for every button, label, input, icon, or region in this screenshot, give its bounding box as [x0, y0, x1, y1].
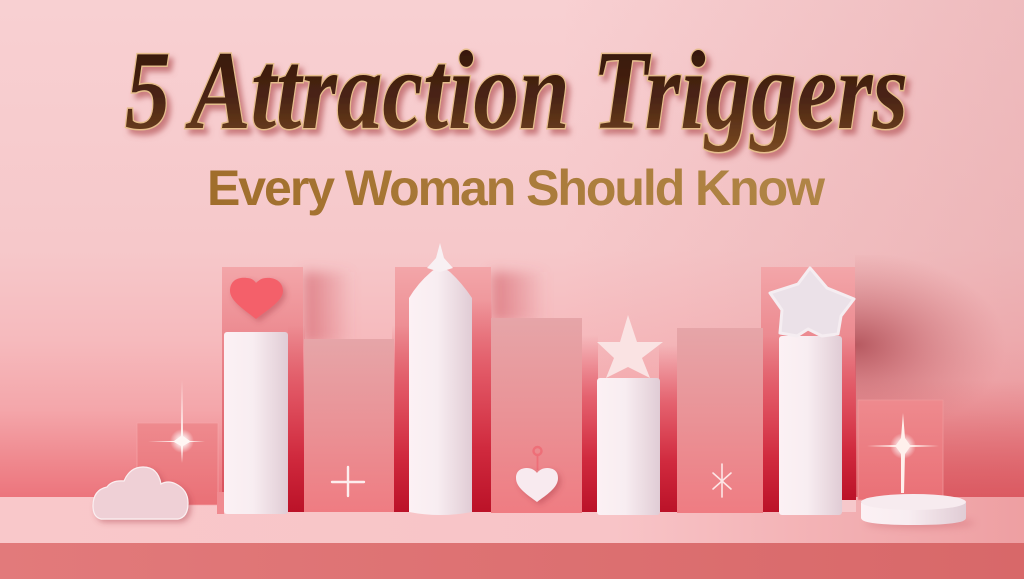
back panel: large star [761, 267, 855, 500]
bar 3: cylinder [597, 378, 660, 515]
small panel: left sparkle [137, 423, 224, 514]
icon: cloud [93, 467, 188, 519]
back panel: tall centre [395, 267, 491, 497]
icon: large white star [770, 268, 854, 336]
back panel: heart [222, 267, 303, 497]
disc podium [861, 494, 975, 528]
front panel 4 [677, 328, 763, 513]
front panel 3 [491, 318, 582, 513]
icon: right sparkle [867, 413, 939, 493]
front panel 2 [304, 339, 394, 512]
icon: pale star [597, 315, 663, 378]
bar 2: tall cone-topped cylinder [409, 243, 472, 515]
icon: plus [332, 467, 364, 496]
shelf [0, 497, 1024, 579]
dark red gaps between the bars [288, 300, 856, 512]
icon: white heart with ring [516, 447, 558, 502]
icon: red heart [230, 278, 283, 319]
small panel: right sparkle [858, 400, 943, 500]
bar 1: cylinder [224, 332, 288, 514]
bar 4: cylinder [779, 336, 842, 515]
subtitle: Every Woman Should Know [207, 160, 825, 216]
icon: asterisk sparkle [713, 464, 731, 497]
icon: left sparkle [148, 380, 205, 463]
soft cast shadows on the wall [303, 255, 1015, 435]
